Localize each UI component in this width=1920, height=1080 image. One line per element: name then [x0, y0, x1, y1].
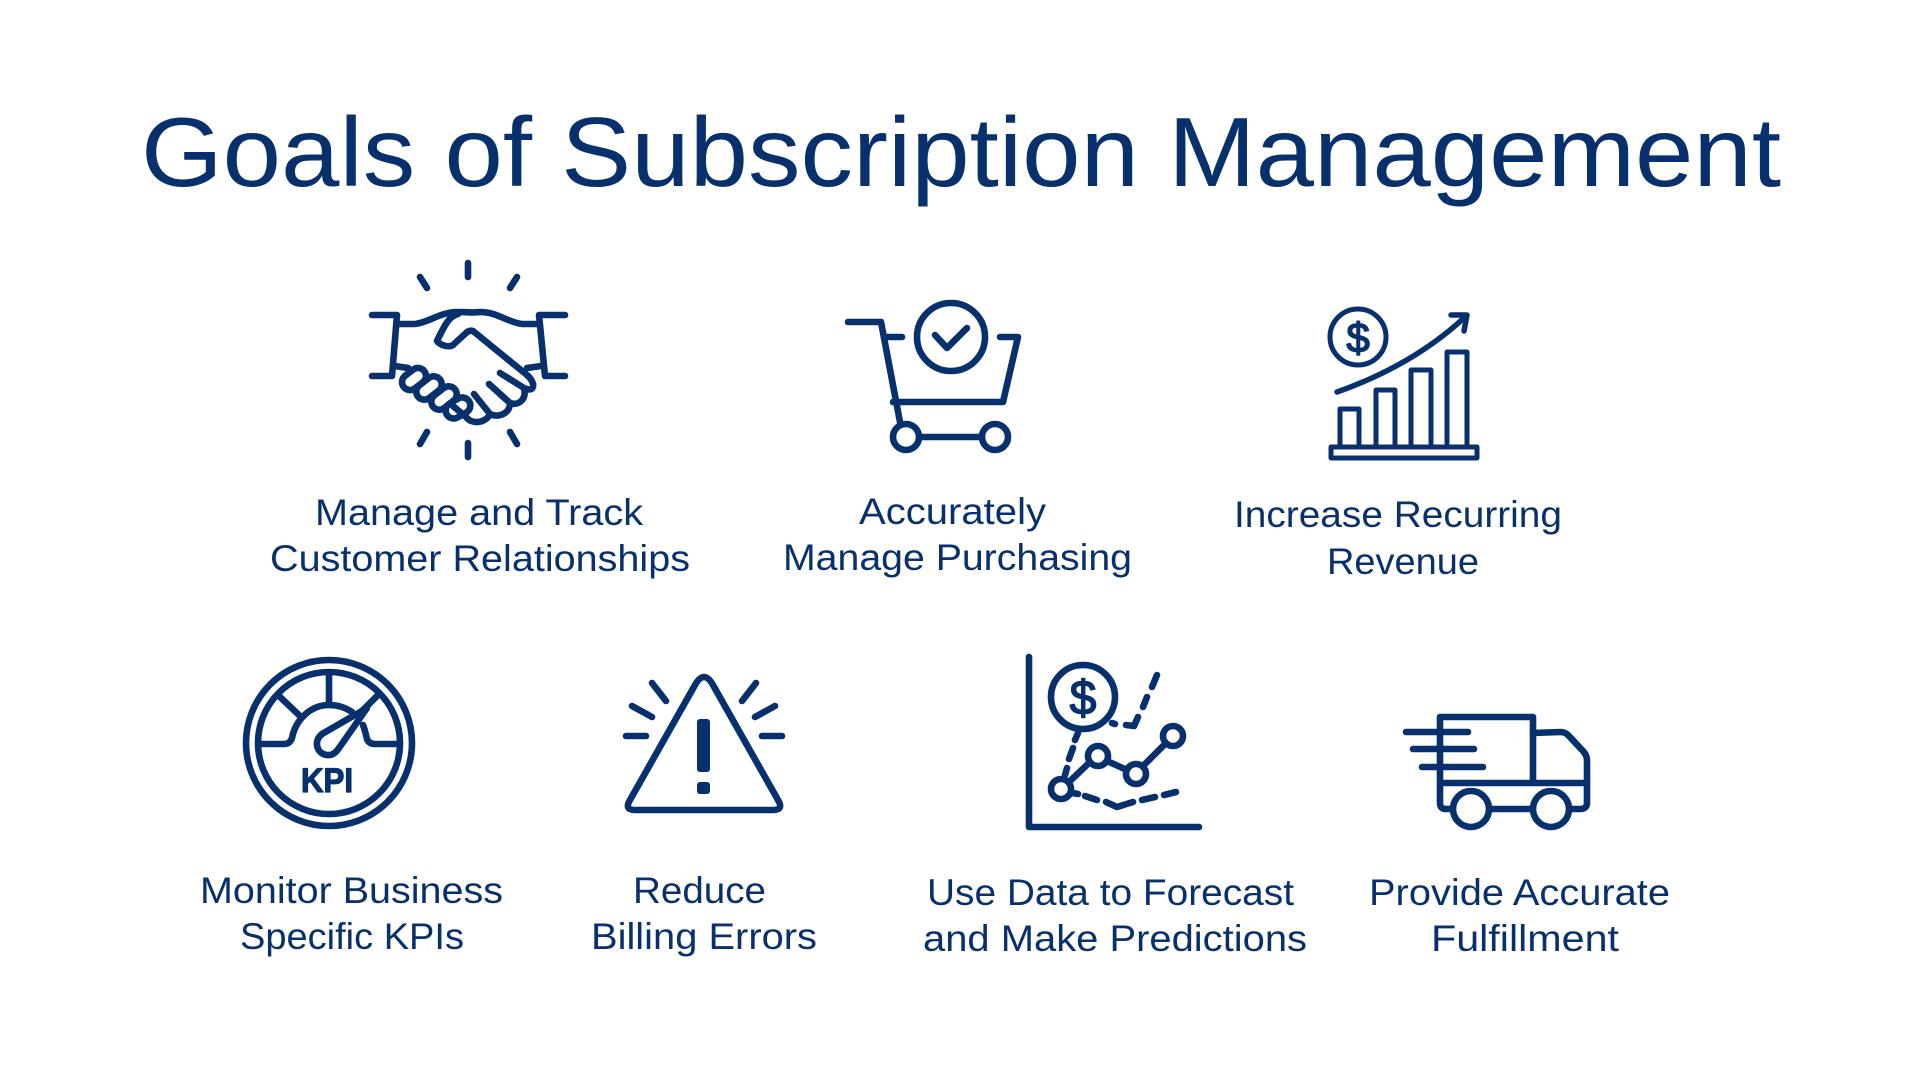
label: manage and track customer relationships [270, 492, 690, 579]
title: Goals of Subscription Management [141, 97, 1781, 207]
panel: manage and track customer relationships [270, 263, 690, 579]
label: reduce billing errors [591, 870, 817, 957]
label: provide accurate fulfillment: Provide Accurate [1369, 872, 1670, 913]
label: increase recurring revenue: Revenue [1327, 541, 1479, 582]
icon: growth chart with dollar coin: $ [1346, 314, 1370, 361]
panel: reduce billing errors [591, 677, 817, 957]
label: monitor business specific kpis: Monitor Business [200, 870, 503, 911]
icon: forecast line chart [1029, 657, 1199, 827]
label: use data to forecast and make predictions: and Make Predictions [923, 918, 1307, 959]
icon: growth chart with dollar coin [1330, 309, 1477, 458]
label: monitor business specific kpis [200, 870, 503, 957]
icon: warning triangle [626, 677, 782, 810]
label: manage and track customer relationships: Customer Relationships [270, 538, 690, 579]
panel: monitor business specific kpis [200, 660, 503, 957]
label: provide accurate fulfillment: Fulfillment [1431, 918, 1620, 959]
label: increase recurring revenue [1234, 494, 1562, 582]
panel: accurately manage purchasing [783, 303, 1132, 578]
panel: use data to forecast [923, 657, 1307, 959]
label: increase recurring revenue: Increase Recurring [1234, 494, 1562, 535]
label: use data to forecast and make predictions: Use Data to Forecast [927, 872, 1295, 913]
icon: handshake [372, 263, 565, 457]
panel: provide accurate fulfillment [1369, 717, 1670, 959]
icon: forecast line chart: $ [1070, 672, 1096, 725]
label: reduce billing errors: Reduce [633, 870, 766, 911]
panel: increase recurring revenue [1234, 309, 1562, 582]
label: accurately manage purchasing: Manage Purchasing [783, 537, 1132, 578]
icon: kpi gauge: KPI [301, 762, 353, 800]
label: reduce billing errors: Billing Errors [591, 916, 817, 957]
label: provide accurate fulfillment [1369, 872, 1670, 959]
label: manage and track customer relationships: Manage and Track [315, 492, 644, 533]
label: use data to forecast and make predictions [923, 872, 1307, 959]
icon: kpi gauge [246, 660, 412, 826]
label: monitor business specific kpis: Specific KPIs [240, 916, 464, 957]
icon: shopping cart with check [848, 303, 1018, 450]
icon: delivery truck [1406, 717, 1587, 827]
label: accurately manage purchasing: Accurately [859, 491, 1047, 532]
label: accurately manage purchasing [783, 491, 1132, 578]
